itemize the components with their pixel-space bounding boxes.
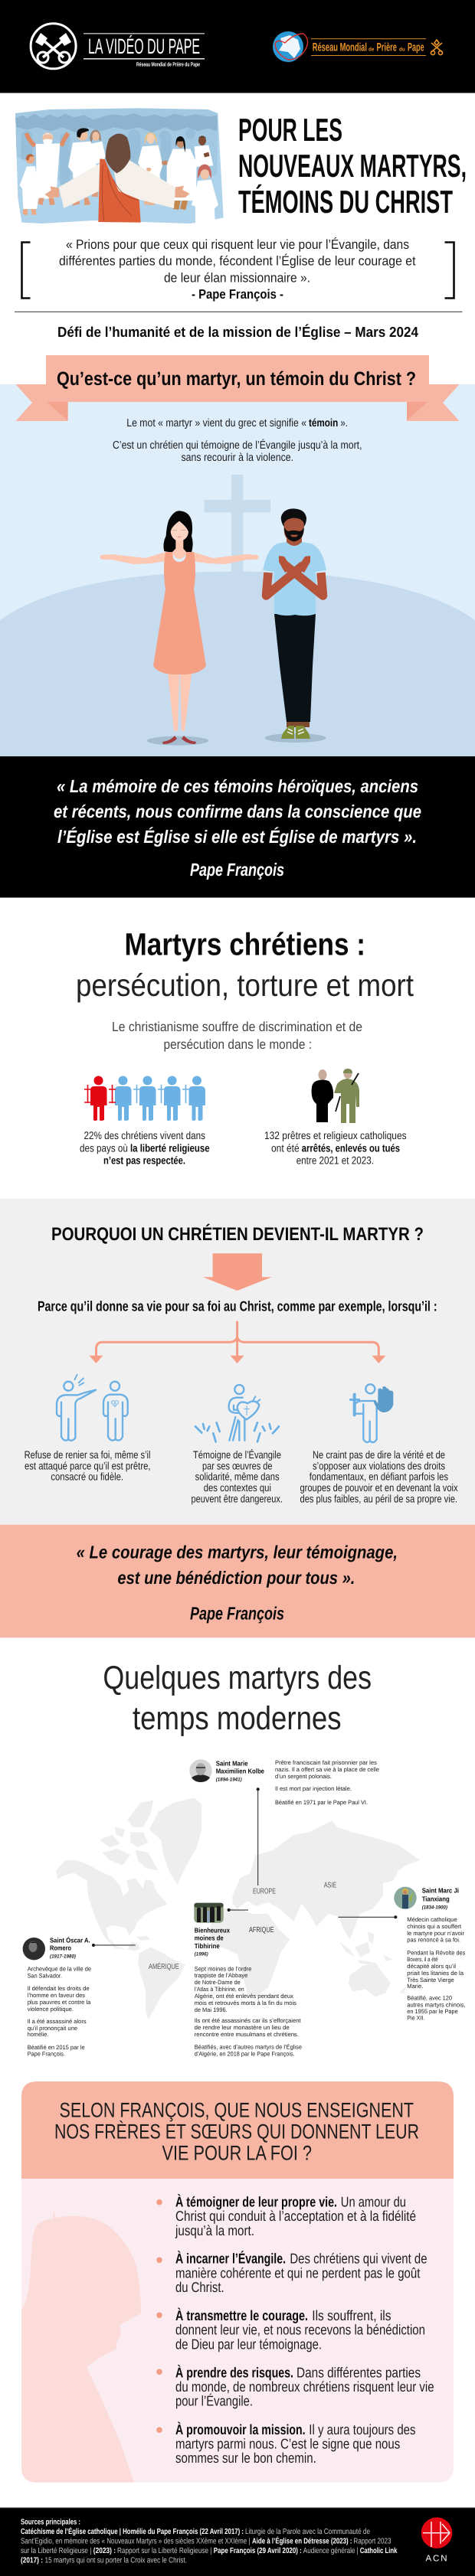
figure: woman with open arms bbox=[100, 511, 259, 746]
bullet: to promote mission bbox=[156, 2421, 415, 2466]
callout: Saint Maximilien Kolbe: Béatifié en 1971 par le Pape Paul VI. bbox=[275, 1799, 368, 1806]
text: statistic 132 priests: ont été bbox=[271, 1142, 300, 1154]
North America bbox=[56, 1860, 167, 1951]
callout: Saint Marc Ji Tianxiang: en 1955 par le Pape bbox=[407, 2008, 458, 2015]
callout: Saint Marc Ji Tianxiang: (1834-1900) bbox=[422, 1905, 447, 1910]
icon: arrested priest and soldier bbox=[312, 1069, 359, 1123]
arrows: three-way connector bbox=[89, 1321, 385, 1363]
panel: footer sources: Rapport sur la Liberté Religieuse | bbox=[117, 2547, 211, 2555]
icon: five people with cross, one red bbox=[84, 1076, 205, 1121]
title bbox=[238, 112, 467, 220]
title: POUR LES bbox=[238, 112, 342, 148]
callout: Saint Óscar Romero: Il a été assassiné alors bbox=[28, 2018, 87, 2025]
callout: Blessed monks of Tibhirine bbox=[194, 1903, 302, 2057]
callout: Saint Marc Ji Tianxiang: le martyre pour n’avoir bbox=[407, 1930, 464, 1937]
heading: modern martyrs: Quelques martyrs des bbox=[103, 1660, 372, 1696]
panel: footer sources: Audience générale | bbox=[303, 2547, 359, 2555]
definition text: sans recourir à la violence. bbox=[181, 452, 293, 464]
callout: Saint Marc Ji Tianxiang: autres martyrs chinois, bbox=[407, 2001, 466, 2009]
callout: Saint Óscar Romero: homélie. bbox=[28, 2031, 48, 2038]
panel: footer sources: Liturgie de la Parole avec la Communauté de bbox=[245, 2528, 370, 2536]
figure: red haired woman bbox=[192, 165, 218, 223]
panel: black quote: l’Église est Église si elle est Église de martyrs ». bbox=[57, 827, 417, 847]
callout: Saint Marc Ji Tianxiang: Marie. bbox=[407, 1983, 423, 1990]
text: statistic 22%: la liberté religieuse bbox=[130, 1142, 210, 1154]
map labels: continents: AFRIQUE bbox=[249, 1926, 274, 1934]
figure: man with black hair bbox=[68, 128, 98, 206]
bullet: to witness: À témoigner de leur propre vie. bbox=[175, 2193, 337, 2209]
callout: Blessed monks of Tibhirine: Bienheureux bbox=[195, 1926, 230, 1934]
text: column 2: Témoigne de l’Évangile bbox=[193, 1449, 281, 1461]
callout: Saint Marc Ji Tianxiang: chinois qui a souffert bbox=[407, 1923, 462, 1930]
callout: Saint Óscar Romero bbox=[23, 1936, 136, 2058]
bullet: to pass on courage: de Dieu par leur témoignage. bbox=[175, 2336, 322, 2352]
callout: Saint Marc Ji Tianxiang: priait les litanies de la bbox=[407, 1970, 464, 1977]
figure: boy bbox=[20, 154, 40, 215]
callout: Blessed monks of Tibhirine: Sept moines de l’ordre bbox=[195, 1965, 251, 1972]
callout: Saint Marc Ji Tianxiang: Pie XII. bbox=[407, 2014, 424, 2021]
New Zealand bbox=[400, 1987, 406, 1994]
ribbon banner: Qu’est-ce qu’un martyr, un témoin du Christ ? bbox=[57, 368, 416, 390]
callout: Saint Óscar Romero: Archevêque de la ville de bbox=[28, 1966, 91, 1973]
bullet: to promote mission: martyrs parmi nous. C’est le signe que nous bbox=[175, 2435, 400, 2451]
map labels: continents: ASIE bbox=[324, 1882, 337, 1890]
logo text: Réseau Mondial de Prière du Pape: de bbox=[369, 47, 374, 53]
bullet: to take risks: Dans différentes parties bbox=[296, 2364, 421, 2380]
callout: Saint Maximilien Kolbe bbox=[189, 1759, 379, 1885]
figure: dark haired woman bbox=[162, 136, 197, 210]
bullet: to witness: Un amour du bbox=[341, 2193, 406, 2209]
bullet: to take risks bbox=[156, 2364, 434, 2409]
callout: Saint Maximilien Kolbe: (1894-1941) bbox=[216, 1778, 242, 1783]
callout: Blessed monks of Tibhirine: Tibhirine bbox=[195, 1942, 220, 1950]
bullet: to promote mission: Il y aura toujours des bbox=[309, 2421, 415, 2437]
text: column 1: Refuse de renier sa foi, même s’il bbox=[25, 1449, 150, 1461]
callout: Saint Óscar Romero: qu’il prononçait une bbox=[28, 2025, 77, 2032]
definition text: témoin bbox=[309, 417, 338, 429]
quote: Pope's intention with brackets: de leur élan missionnaire ». bbox=[164, 269, 310, 285]
callout: Saint Maximilien Kolbe: nazis. Il a offert sa vie à la place de celle bbox=[275, 1766, 379, 1773]
callout: Saint Marc Ji Tianxiang bbox=[338, 1887, 466, 2021]
text: column 1: consacré ou fidèle. bbox=[51, 1471, 123, 1483]
figure: blonde woman bbox=[138, 132, 162, 205]
definition text: C’est un chrétien qui témoigne de l’Évangile jusqu’à la mort, bbox=[113, 439, 362, 452]
figure: old man with raised arms bbox=[26, 132, 68, 205]
callout: Saint Óscar Romero: Il défendait les droits de bbox=[28, 1985, 90, 1992]
text: column 2: par ses œuvres de bbox=[202, 1460, 273, 1471]
panel: black quote bbox=[0, 756, 475, 898]
callout: Saint Óscar Romero: plus pauvres et contre la bbox=[28, 1999, 91, 2006]
bullet: to embody the Gospel: du Christ. bbox=[175, 2279, 224, 2295]
panel: footer sources: (2023) : bbox=[93, 2547, 116, 2555]
bullet: to pass on courage: donnent leur vie, et nous recevons la bénédiction bbox=[175, 2322, 425, 2338]
heading: Christian martyrs: Martyrs chrétiens : bbox=[124, 927, 365, 962]
icon: crossed keys logo bbox=[31, 24, 76, 69]
text: statistic 132 priests: entre 2021 et 2023. bbox=[296, 1154, 374, 1167]
callout: Saint Óscar Romero: Romero bbox=[50, 1944, 72, 1952]
panel: salmon quote: Pape François bbox=[190, 1604, 284, 1624]
South America bbox=[138, 1947, 185, 2019]
callout: Saint Marc Ji Tianxiang: décapité alors qu’il bbox=[407, 1963, 456, 1970]
icon: witness with heart amid grass bbox=[195, 1385, 279, 1441]
text: column 2 bbox=[192, 1449, 283, 1504]
icon: attacked person pointing bbox=[57, 1375, 128, 1441]
definition text: Le mot « martyr » vient du grec et signifie « bbox=[126, 417, 306, 429]
silhouette: Pope Francis profile bbox=[21, 2212, 141, 2483]
bullet: to take risks: pour l’Évangile. bbox=[175, 2393, 253, 2409]
text: statistic 132 priests: 132 prêtres et religieux catholiques bbox=[264, 1129, 407, 1141]
Greenland bbox=[149, 1797, 201, 1885]
portrait: Ji Tianxiang bbox=[394, 1887, 417, 1909]
definition text bbox=[113, 417, 362, 464]
quote: Pope's intention with brackets: « Prions pour que ceux qui risquent leur vie pour l’Évangile, dans bbox=[66, 237, 409, 252]
icon: orange keys bbox=[431, 40, 443, 55]
callout: Blessed monks of Tibhirine: mois et retrouvés morts à la fin du mois bbox=[195, 2000, 296, 2006]
panel: what is a martyr bbox=[0, 355, 475, 756]
icon: cross bbox=[204, 475, 270, 573]
icon: globe with heart bbox=[273, 31, 308, 62]
icon: ACN logo bbox=[421, 2517, 452, 2563]
text: statistic 22%: des pays où bbox=[80, 1142, 128, 1154]
callout: Saint Óscar Romero: l’homme en faveur des bbox=[28, 1992, 85, 1999]
map labels: continents bbox=[149, 1882, 337, 1971]
text: column 3 bbox=[300, 1449, 458, 1504]
Eurasia bbox=[232, 1820, 420, 1939]
photo: monks bbox=[194, 1903, 224, 1923]
Australia bbox=[349, 1962, 391, 1996]
map labels: continents: EUROPE bbox=[253, 1887, 276, 1895]
icon: person raising hand with cross bbox=[350, 1384, 393, 1442]
text: column 2: des contextes qui bbox=[204, 1482, 271, 1494]
panel: footer sources: Aide à l’Église en Détresse (2023) : bbox=[252, 2535, 352, 2545]
logo text: Réseau Mondial de Prière du Pape: Réseau Mondial bbox=[313, 41, 367, 54]
panel: black quote: Pape François bbox=[190, 860, 284, 880]
arrow: big down arrow bbox=[203, 1253, 272, 1291]
panel: footer sources: Catholic Link bbox=[360, 2547, 398, 2555]
definition text: ». bbox=[340, 417, 348, 429]
text: intro persecution bbox=[112, 1019, 362, 1052]
text: column 1: est attaqué parce qu’il est prêtre, bbox=[25, 1460, 150, 1471]
text: column 3: fondamentaux, en défiant parfois les bbox=[310, 1471, 448, 1483]
callout: Saint Marc Ji Tianxiang: Médecin catholique bbox=[407, 1916, 457, 1923]
callout: Blessed monks of Tibhirine: (1996) bbox=[195, 1951, 208, 1957]
heading: Christian martyrs: persécution, torture et mort bbox=[76, 968, 414, 1003]
subtitle: monthly challenge: Défi de l’humanité et de la mission de l’Église – Mars 2024 bbox=[57, 324, 419, 340]
chart: world map bbox=[56, 1797, 420, 2019]
Southeast Asia islands bbox=[339, 1931, 393, 1965]
bullet: to take risks: À prendre des risques. bbox=[175, 2364, 293, 2380]
panel: salmon quote: est une bénédiction pour tous ». bbox=[117, 1568, 355, 1588]
panel: why a Christian becomes a martyr bbox=[0, 1199, 475, 1525]
panel: footer sources: Pape François (29 Avril 2020) : bbox=[214, 2547, 302, 2555]
text: column 2: solidarité, même dans bbox=[195, 1471, 280, 1483]
panel: footer sources: (2017) : bbox=[21, 2556, 43, 2565]
logo text: Réseau Mondial de Prière du Pape: Prière bbox=[377, 41, 397, 54]
callout: Saint Marc Ji Tianxiang: Boxers, il a été bbox=[407, 1956, 438, 1963]
quote: Pope's intention with brackets bbox=[21, 237, 454, 302]
heading: modern martyrs: temps modernes bbox=[133, 1700, 342, 1737]
callout: Saint Óscar Romero: San Salvador. bbox=[28, 1972, 62, 1980]
callout: Blessed monks of Tibhirine: trappiste de l’Abbaye bbox=[195, 1972, 247, 1979]
text: column 3: Ne craint pas de dire la vérité et de bbox=[313, 1449, 445, 1461]
callout: Blessed monks of Tibhirine: d’Algérie, en 2018 par le Pape François. bbox=[195, 2050, 295, 2057]
panel: footer sources bbox=[0, 2507, 475, 2576]
bullet: to witness: Christ qui conduit à l’acceptation et à la fidélité bbox=[175, 2208, 416, 2224]
callout: Blessed monks of Tibhirine: de rendre leur monastère un lieu de bbox=[195, 2024, 290, 2031]
callout: Saint Maximilien Kolbe: Il est mort par injection létale. bbox=[275, 1785, 352, 1792]
bullet: to witness: jusqu’à la mort. bbox=[175, 2222, 254, 2238]
logo text: Réseau Mondial de Prière du Pape: du bbox=[399, 47, 405, 53]
callout: Saint Marc Ji Tianxiang: Pendant la Révolte des bbox=[407, 1949, 465, 1956]
bullet: to witness bbox=[156, 2193, 416, 2238]
text: intro persecution: persécution dans le monde : bbox=[164, 1037, 312, 1052]
callout: Blessed monks of Tibhirine: rencontre entre musulmans et chrétiens. bbox=[195, 2031, 299, 2038]
callout: Blessed monks of Tibhirine: l’Atlas à Tibhirine, en bbox=[195, 1986, 244, 1993]
callout: Saint Óscar Romero: Pape François. bbox=[28, 2050, 65, 2058]
callout: Saint Óscar Romero: Béatifié en 2015 par le bbox=[28, 2044, 85, 2051]
quote: Pope's intention with brackets: différentes parties du monde, fécondent l’Église de leur courage et bbox=[59, 253, 416, 269]
callout: Blessed monks of Tibhirine: de Notre-Dame de bbox=[195, 1979, 241, 1986]
panel: what martyrs teach us bbox=[21, 2081, 454, 2483]
callout: Saint Maximilien Kolbe: d’un sergent polonais. bbox=[275, 1773, 332, 1780]
text: statistic 132 priests bbox=[264, 1129, 407, 1167]
bullet: to promote mission: À promouvoir la mission. bbox=[175, 2421, 306, 2437]
figure: bald man bbox=[195, 135, 213, 167]
text: column 3: s’opposer aux violations des droits bbox=[313, 1460, 445, 1471]
callout: Saint Marc Ji Tianxiang: Saint Marc Ji bbox=[422, 1887, 459, 1895]
text: column 2: peuvent être dangereux. bbox=[192, 1493, 283, 1504]
logo text: Réseau Mondial de Prière du Pape: Pape bbox=[408, 41, 424, 54]
heading: Christian martyrs bbox=[76, 927, 414, 1003]
bullet: to embody the Gospel bbox=[156, 2251, 427, 2295]
figure: man with crossed arms bbox=[263, 508, 326, 743]
logo text: La Vidéo du Pape bbox=[84, 33, 205, 68]
panel: salmon quote: « Le courage des martyrs, leur témoignage, bbox=[77, 1543, 398, 1562]
panel: footer sources: Sources principales : bbox=[21, 2519, 80, 2527]
text: statistic 132 priests: arrêtés, enlevés ou tués bbox=[302, 1142, 400, 1154]
panel: footer sources: sur la Liberté Religieuse | bbox=[21, 2547, 91, 2555]
figure: Christ seen from behind bbox=[44, 134, 190, 223]
ribbon banner bbox=[15, 355, 460, 421]
bullet: to pass on courage bbox=[156, 2307, 425, 2352]
bullet: to embody the Gospel: À incarner l’Évangile. bbox=[175, 2251, 286, 2267]
panel: black quote: « La mémoire de ces témoins héroïques, anciens bbox=[57, 776, 418, 796]
panel: footer sources: 15 martyrs qui ont su porter la Croix avec le Christ. bbox=[44, 2556, 187, 2565]
callout: Saint Marc Ji Tianxiang: Très Sainte Vierge bbox=[407, 1977, 454, 1983]
panel: footer sources: Rapport 2023 bbox=[353, 2537, 391, 2545]
bullet: to promote mission: sommes sur le bon chemin. bbox=[175, 2450, 316, 2466]
callout: Saint Maximilien Kolbe: Maximilien Kolbe bbox=[216, 1768, 264, 1775]
bullet: to embody the Gospel: Des chrétiens qui vivent de bbox=[290, 2251, 428, 2267]
logo text: La Vidéo du Pape: Réseau Mondial de Prière du Pape bbox=[136, 61, 200, 68]
panel: footer sources: Catéchisme de l’Église catholique | Homélie du Pape François (22 Avril 2017) : bbox=[21, 2526, 244, 2536]
portrait: Romero bbox=[23, 1938, 45, 1960]
bullet: to pass on courage: À transmettre le courage. bbox=[175, 2307, 308, 2323]
logo text: Réseau Mondial de Prière du Pape bbox=[311, 38, 426, 56]
map labels: continents: AMÉRIQUE bbox=[149, 1962, 179, 1971]
text: intro persecution: Le christianisme souffre de discrimination et de bbox=[112, 1019, 362, 1034]
heading: modern martyrs bbox=[103, 1660, 372, 1737]
Africa bbox=[209, 1908, 290, 1996]
callout: Saint Óscar Romero: (1917-1980) bbox=[50, 1954, 76, 1959]
portrait: Kolbe bbox=[189, 1759, 212, 1782]
figure: woman behind bbox=[90, 130, 106, 164]
text: statistic 22%: 22% des chrétiens vivent dans bbox=[84, 1129, 205, 1141]
text: statistic 22%: n’est pas respectée. bbox=[103, 1154, 185, 1167]
icon: ACN logo: ACN bbox=[426, 2554, 447, 2563]
illustration: Christ welcoming martyrs bbox=[15, 108, 224, 224]
bullet: to pass on courage: Ils souffrent, ils bbox=[312, 2307, 391, 2323]
panel: what martyrs teach us: VIE POUR LA FOI ? bbox=[162, 2141, 312, 2164]
Arctic islands bbox=[100, 1801, 159, 1870]
bullet: to embody the Gospel: manière cohérente et qui ne perdent pas le goût bbox=[175, 2264, 420, 2281]
callout: Saint Maximilien Kolbe: Prêtre franciscain fait prisonnier par les bbox=[275, 1759, 377, 1766]
callout: Blessed monks of Tibhirine: moines de bbox=[195, 1934, 224, 1941]
callout: Saint Maximilien Kolbe: Saint Marie bbox=[216, 1760, 248, 1768]
callout: Saint Marc Ji Tianxiang: pas renoncé à sa foi. bbox=[407, 1937, 460, 1944]
text: statistic 22% bbox=[80, 1129, 210, 1167]
panel: salmon quote bbox=[0, 1525, 475, 1637]
callout: Blessed monks of Tibhirine: Ils ont été assassinés car ils s’efforçaient bbox=[195, 2017, 302, 2024]
callout: Blessed monks of Tibhirine: Algérie, ont été enlevés pendant deux bbox=[195, 1993, 293, 2000]
callout: Saint Marc Ji Tianxiang: Béatifié, avec 120 bbox=[407, 1995, 453, 2002]
panel: black quote: et récents, nous confirme dans la conscience que bbox=[54, 802, 421, 821]
Caribbean bbox=[136, 1935, 151, 1941]
panel: black header with logos bbox=[0, 0, 475, 93]
quote: Pope's intention with brackets: - Pape François - bbox=[192, 286, 283, 302]
logo text: La Vidéo du Pape: LA VIDÉO DU PAPE bbox=[88, 34, 200, 58]
callout: Blessed monks of Tibhirine: de Mai 1996. bbox=[195, 2006, 228, 2013]
callout: Saint Marc Ji Tianxiang: Tianxiang bbox=[422, 1895, 450, 1902]
callout: Saint Óscar Romero: violence politique. bbox=[28, 2006, 74, 2013]
callout: Blessed monks of Tibhirine: Béatifiés, avec d’autres martyrs de l’Église bbox=[195, 2044, 302, 2051]
panel: footer sources: Sant’Egidio, en mémoire des « Nouveaux Martyrs » des siècles XXème et XXIème | bbox=[21, 2537, 251, 2545]
callout: Saint Óscar Romero: Saint Óscar A. bbox=[50, 1936, 90, 1944]
text: column 1 bbox=[25, 1449, 150, 1483]
